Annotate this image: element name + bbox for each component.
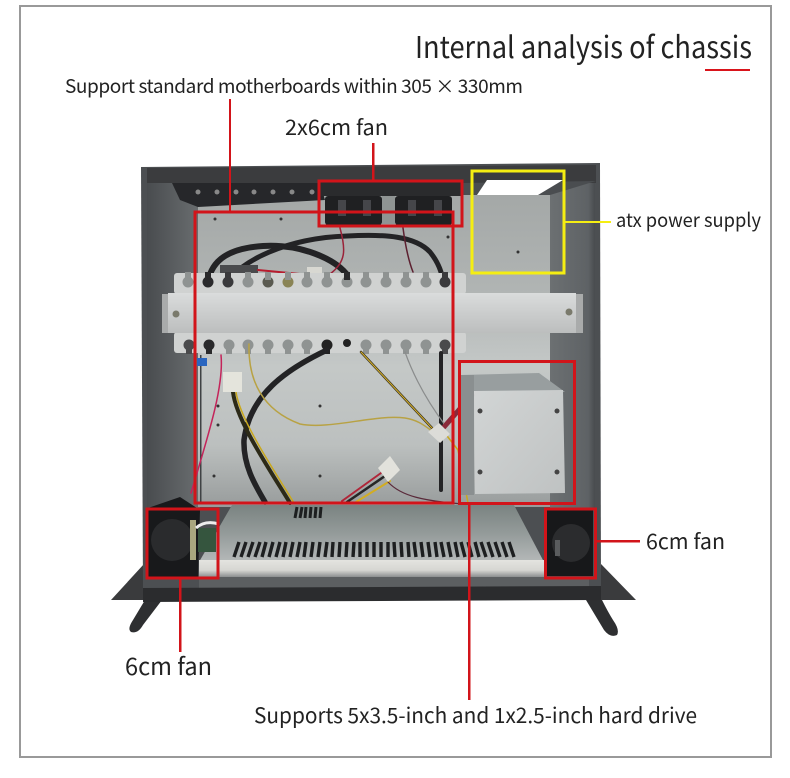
rear opening — [477, 180, 563, 195]
chassis ears and feet — [111, 564, 636, 636]
chassis body — [141, 163, 601, 593]
callout: power supply — [472, 171, 611, 273]
callout: top fans — [319, 143, 462, 226]
label: 2x6cm fan: 2x6cm fan — [285, 112, 388, 142]
top twin fans — [320, 182, 461, 225]
label: right 6cm fan: 6cm fan — [646, 526, 725, 556]
label: motherboard support: Support standard motherboards within 305 × 330mm — [65, 72, 523, 99]
label: left 6cm fan: 6cm fan — [125, 648, 212, 682]
lower power supply unit — [199, 505, 589, 588]
right rear fan — [547, 510, 593, 576]
hard drive cage — [461, 373, 565, 495]
title: Internal analysis of chassis — [415, 23, 752, 67]
lower wiring — [191, 344, 480, 505]
cable comb lower — [174, 332, 466, 354]
top lip — [147, 165, 596, 183]
chassis photo illustration — [111, 163, 636, 636]
callout: left fan — [147, 509, 218, 652]
left wall — [147, 183, 200, 508]
panel mounting holes — [212, 218, 520, 478]
mounting rail — [162, 293, 583, 333]
left rear fan — [148, 497, 219, 578]
right wall — [550, 180, 595, 508]
cable comb upper — [174, 272, 466, 294]
callout: motherboard — [195, 99, 453, 503]
upper wiring — [208, 228, 443, 283]
back panel — [198, 195, 550, 507]
callout: hard drive — [460, 362, 574, 700]
label: hard drive support: Supports 5x3.5-inch and 1x2.5-inch hard drive — [254, 700, 697, 730]
callout: right fan — [546, 509, 640, 578]
title underline — [705, 69, 750, 71]
label: atx power supply: atx power supply — [616, 206, 761, 233]
right corner bracket — [463, 181, 596, 195]
dark IO band with screws — [172, 183, 325, 207]
front bottom bar — [143, 586, 601, 602]
panel side line — [200, 355, 202, 503]
